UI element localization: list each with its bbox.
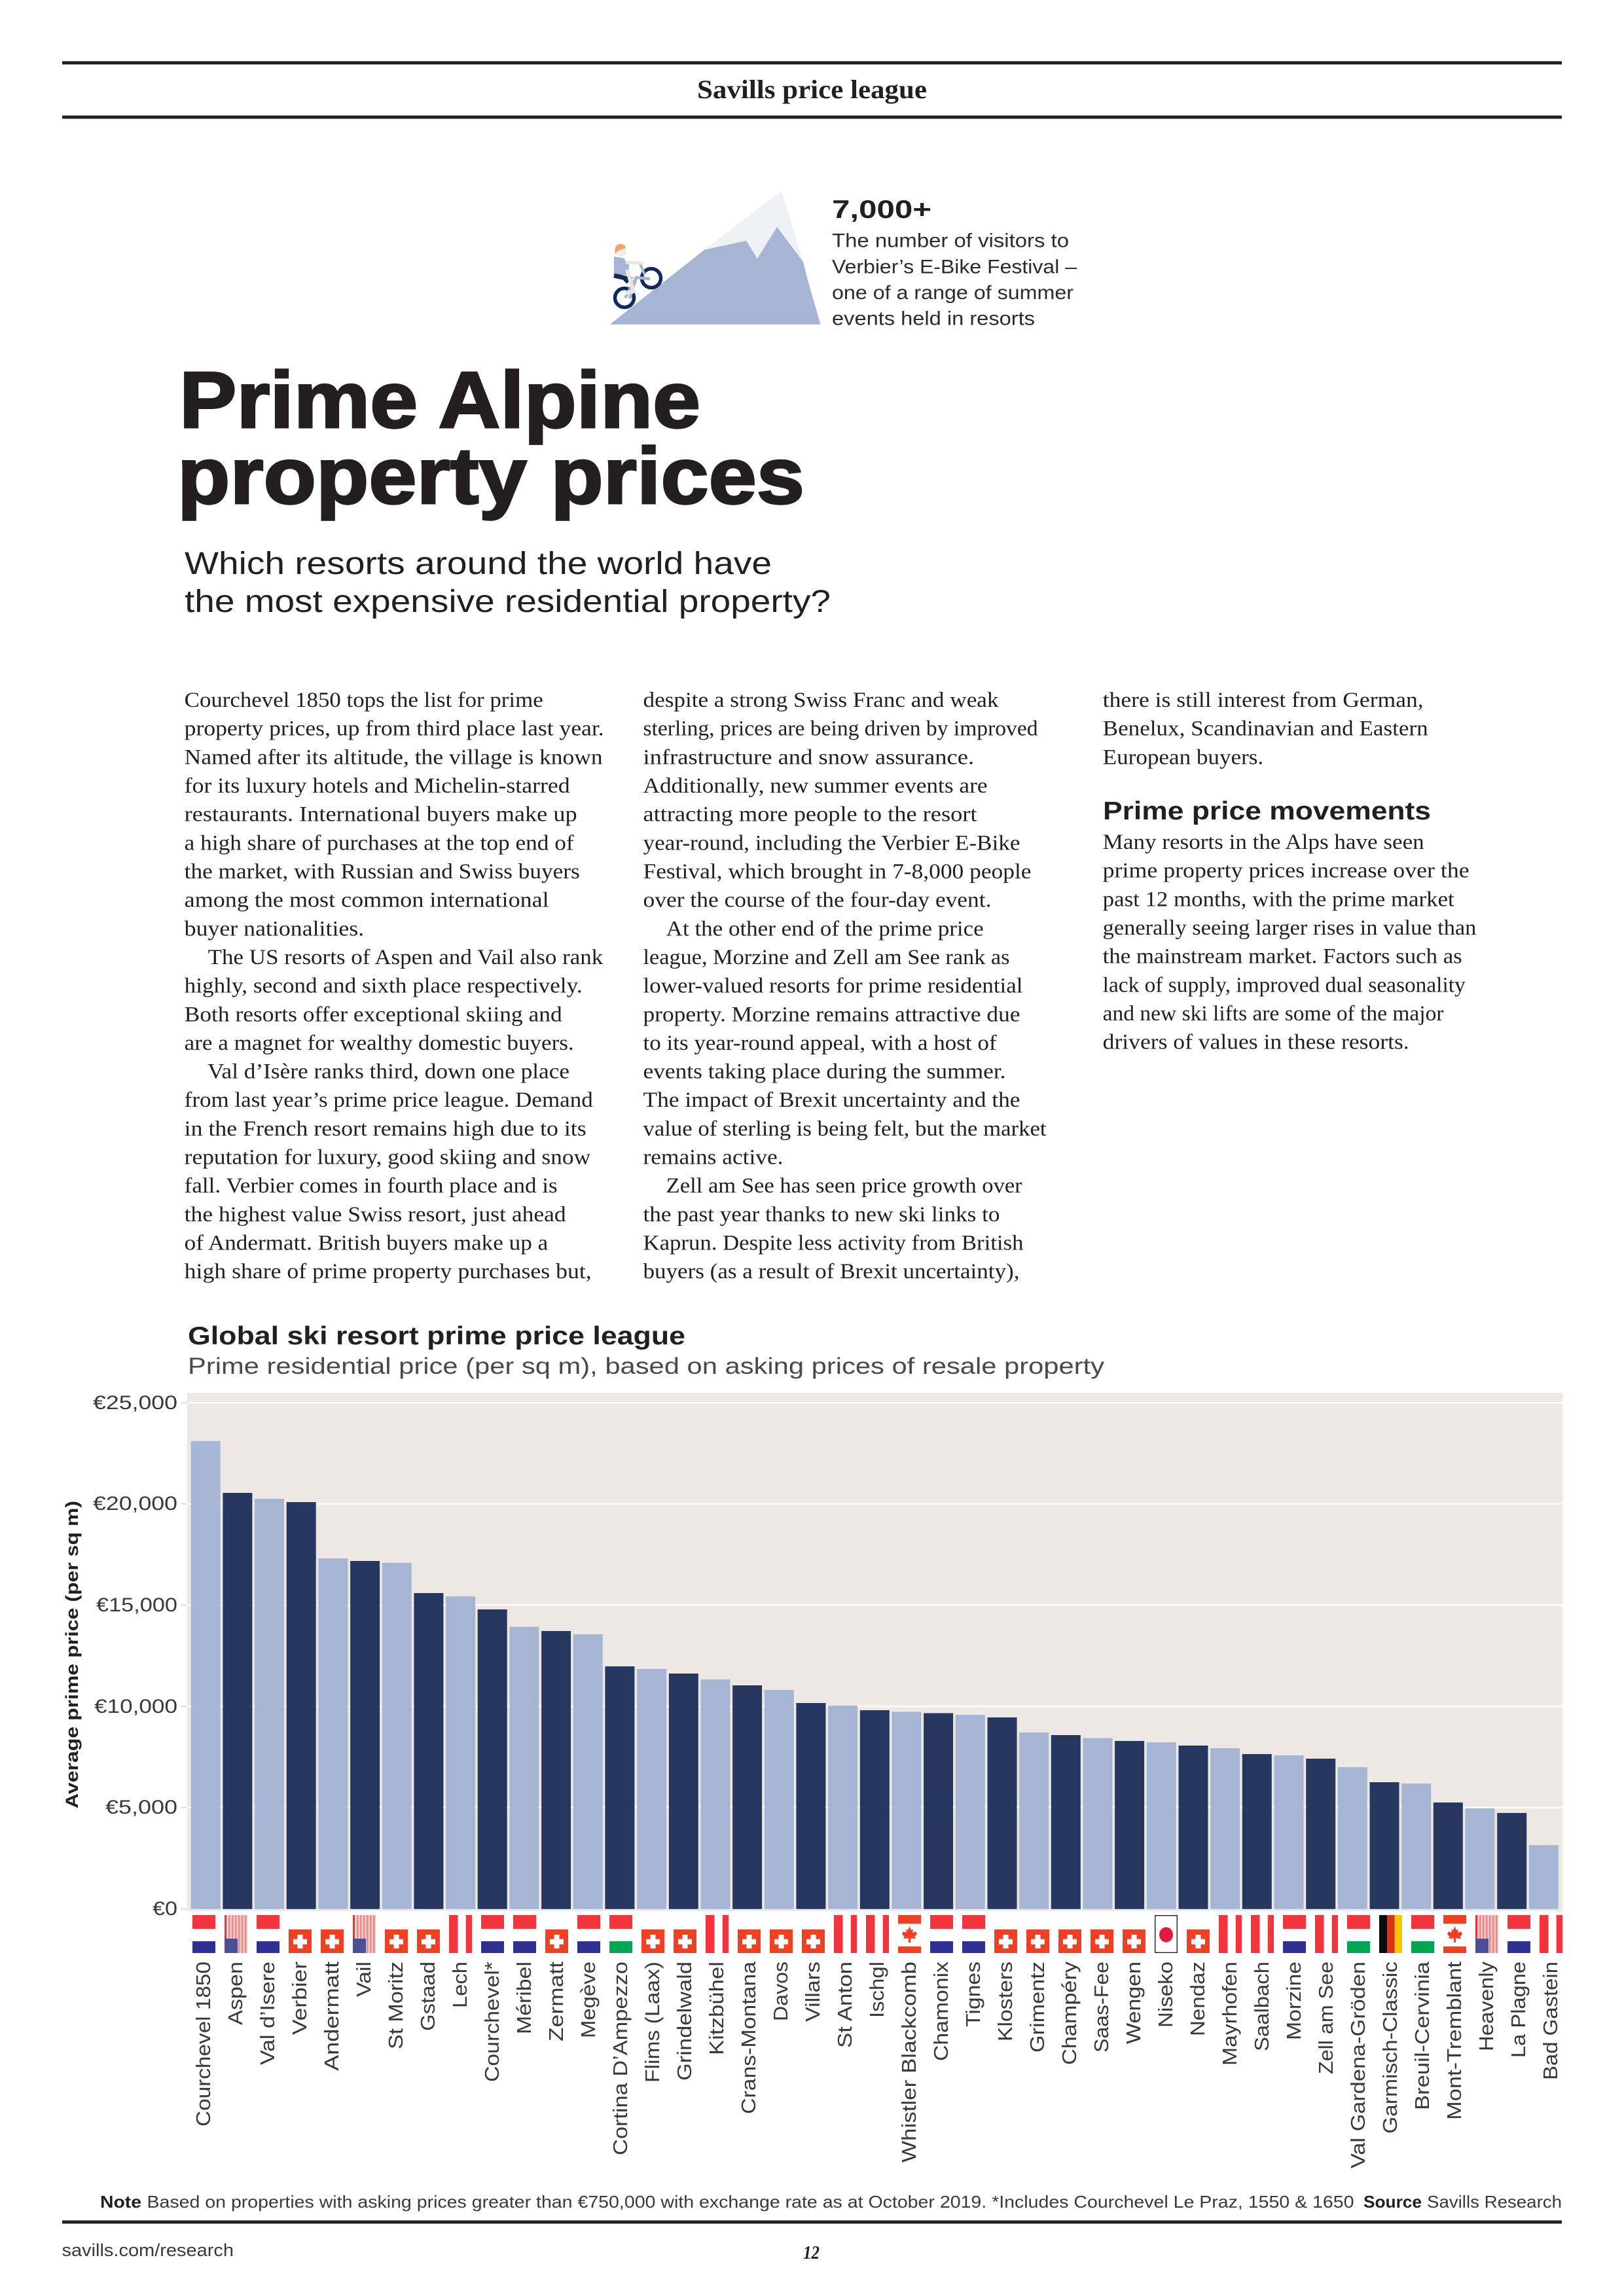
text block: column 1: the market, with Russian and Swiss buyers <box>185 860 580 884</box>
resort name labels: Nendaz <box>1186 1962 1209 2036</box>
text block: prime price movements: generally seeing larger rises in value than <box>1103 916 1476 940</box>
resort name labels: Lech <box>448 1962 471 2008</box>
resort name labels: Andermatt <box>320 1962 343 2071</box>
text block: column 2: value of sterling is being felt, but the market <box>643 1117 1046 1141</box>
bar: Vail <box>350 1561 380 1909</box>
resort name labels: Klosters <box>994 1962 1017 2041</box>
bar: Mont-Tremblant <box>1434 1803 1463 1909</box>
resort name labels: Heavenly <box>1475 1961 1498 2051</box>
resort name labels: Val d’Isere <box>256 1962 279 2065</box>
callout: 7,000+ visitors <box>832 196 1077 330</box>
resort name labels: Crans-Montana <box>737 1961 760 2114</box>
bar: Breuil-Cervinia <box>1401 1784 1431 1909</box>
resort name labels <box>192 1961 1562 2168</box>
icon: cyclist riding up a mountain <box>610 191 821 325</box>
bar: La Plagne <box>1497 1813 1526 1909</box>
resort name labels: Cortina D’Ampezzo <box>609 1962 632 2155</box>
callout: 7,000+ visitors: events held in resorts <box>832 308 1035 330</box>
resort name labels: Courchevel 1850 <box>192 1962 215 2126</box>
resort name labels: Villars <box>801 1962 824 2022</box>
text block: column 1: from last year’s prime price league. Demand <box>185 1088 593 1112</box>
callout: 7,000+ visitors: 7,000+ <box>832 196 931 224</box>
text block: column 1: are a magnet for wealthy domestic buyers. <box>185 1031 574 1055</box>
resort name labels: Saas-Fee <box>1090 1962 1113 2053</box>
bar chart <box>191 1441 1559 1909</box>
text block: column 2: events taking place during the summer. <box>643 1060 1005 1084</box>
text block: prime price movements: past 12 months, with the prime market <box>1103 888 1454 911</box>
resort name labels: Gstaad <box>416 1962 439 2031</box>
header: top rule and section title: Savills price league <box>697 75 927 104</box>
text block: column 2: infrastructure and snow assurance. <box>643 745 974 769</box>
bar: Flims (Laax) <box>637 1669 666 1909</box>
subtitle: the most expensive residential property? <box>185 584 831 619</box>
text block: prime price movements: the mainstream market. Factors such as <box>1103 945 1462 969</box>
text block: prime price movements <box>1103 831 1476 1054</box>
header: top rule and section title <box>62 62 1562 119</box>
bar: Mayrhofen <box>1210 1748 1240 1909</box>
text block: column 2: attracting more people to the resort <box>643 803 977 827</box>
bar: Megève <box>573 1634 603 1909</box>
callout: 7,000+ visitors: one of a range of summer <box>832 282 1074 304</box>
resort name labels: Kitzbühel <box>705 1962 728 2055</box>
subtitle: Which resorts around the world have <box>185 547 772 581</box>
title <box>177 355 804 520</box>
bar: Champéry <box>1051 1735 1081 1909</box>
resort name labels: Grindelwald <box>673 1962 696 2081</box>
chart heading: Global ski resort prime price league <box>188 1322 685 1350</box>
note and source line: Source <box>1363 2192 1422 2212</box>
footer: rule, url and page number: 12 <box>803 2243 820 2263</box>
resort name labels: Ischgl <box>865 1962 888 2018</box>
bar: Andermatt <box>318 1558 348 1909</box>
bar: Klosters <box>987 1717 1017 1909</box>
text block: column 1: fall. Verbier comes in fourth place and is <box>185 1174 558 1198</box>
resort name labels: Chamonix <box>929 1961 952 2061</box>
bar: Cortina D'Ampezzo <box>605 1666 634 1909</box>
resort name labels: Saalbach <box>1250 1962 1273 2051</box>
chart background with gridlines <box>181 1393 1562 1911</box>
y axis labels: €20,000 <box>93 1493 177 1515</box>
bar: Val d'Isere <box>255 1499 284 1909</box>
y axis title: Average prime price (per sq m) <box>62 1501 82 1808</box>
text block: column 3 intro: European buyers. <box>1103 745 1263 769</box>
resort name labels: Flims (Laax) <box>641 1962 664 2083</box>
bar: St Anton <box>828 1706 857 1909</box>
text block: column 2: lower-valued resorts for prime residential <box>643 975 1022 998</box>
bar: Aspen <box>223 1493 252 1909</box>
y axis labels <box>93 1392 177 1920</box>
text block: column 2: Zell am See has seen price growth over <box>666 1174 1022 1198</box>
callout: 7,000+ visitors: The number of visitors to <box>832 230 1069 251</box>
bar: Saalbach <box>1242 1754 1272 1909</box>
resort name labels: Aspen <box>224 1962 247 2025</box>
bar: Grimentz <box>1019 1732 1049 1909</box>
bar: Morzine <box>1274 1755 1304 1909</box>
text block: column 1: a high share of purchases at the top end of <box>185 831 574 855</box>
text block: column 1: of Andermatt. British buyers make up a <box>185 1232 548 1255</box>
text block: column 1: reputation for luxury, good skiing and snow <box>185 1146 591 1170</box>
resort name labels: Davos <box>769 1962 792 2021</box>
bar: Zell am See <box>1306 1759 1335 1909</box>
resort name labels: St Anton <box>833 1962 856 2048</box>
bar: Wengen <box>1115 1741 1144 1909</box>
resort name labels: La Plagne <box>1507 1962 1530 2058</box>
text block: column 1: Both resorts offer exceptional skiing and <box>185 1003 562 1026</box>
bar: Méribel <box>509 1627 539 1909</box>
heading: Prime price movements: Prime price movements <box>1103 797 1431 825</box>
note and source line: Based on properties with asking prices greater than €750,000 with exchange rate as at October 2019. *Includes Courchevel Le Praz, 1550 & 1650 <box>147 2192 1354 2212</box>
resort name labels: Mayrhofen <box>1218 1962 1241 2066</box>
resort name labels: Breuil-Cervinia <box>1411 1961 1434 2110</box>
bar: Nendaz <box>1178 1746 1208 1909</box>
text block: column 1: the highest value Swiss resort, just ahead <box>185 1203 566 1227</box>
text block: column 1: highly, second and sixth place respectively. <box>185 975 583 998</box>
resort name labels: Whistler Blackcomb <box>897 1962 920 2162</box>
bar: St Moritz <box>382 1563 412 1909</box>
y axis labels: €0 <box>153 1898 177 1920</box>
text block: column 2: property. Morzine remains attractive due <box>643 1003 1020 1026</box>
resort name labels: Zell am See <box>1314 1962 1337 2074</box>
y axis labels: €5,000 <box>105 1797 177 1818</box>
bar: Saas-Fee <box>1083 1738 1113 1909</box>
text block: column 2: Additionally, new summer events are <box>643 774 987 798</box>
text block: column 2: league, Morzine and Zell am See rank as <box>643 946 1009 969</box>
bar: Garmisch-Classic <box>1369 1782 1399 1909</box>
text block: column 2: At the other end of the prime price <box>666 917 984 941</box>
text block: column 1: Courchevel 1850 tops the list for prime <box>185 689 543 712</box>
text block: column 2: despite a strong Swiss Franc and weak <box>643 689 999 712</box>
text block: column 1: high share of prime property purchases but, <box>185 1260 592 1283</box>
bar: Gstaad <box>414 1593 443 1909</box>
callout: 7,000+ visitors: Verbier’s E-Bike Festival – <box>832 257 1077 278</box>
row of country flags <box>192 1915 1562 1953</box>
text block: column 1: for its luxury hotels and Michelin-starred <box>185 774 570 798</box>
bar: Verbier <box>287 1502 316 1909</box>
resort name labels: Morzine <box>1282 1962 1305 2040</box>
text block: column 2: The impact of Brexit uncertainty and the <box>643 1088 1020 1112</box>
text block: column 2: Kaprun. Despite less activity from British <box>643 1232 1024 1255</box>
subtitle <box>185 547 831 619</box>
text block: column 1 <box>185 689 604 1283</box>
text block: column 1: Named after its altitude, the village is known <box>185 745 603 769</box>
text block: prime price movements: and new ski lifts are some of the major <box>1103 1002 1444 1026</box>
text block: column 2: to its year-round appeal, with a host of <box>643 1031 997 1055</box>
text block: column 2: over the course of the four-day event. <box>643 889 991 912</box>
resort name labels: Tignes <box>962 1962 984 2027</box>
y axis labels: €10,000 <box>94 1696 177 1717</box>
bar: Tignes <box>956 1715 985 1909</box>
text block: column 1: restaurants. International buyers make up <box>185 803 577 827</box>
resort name labels: Wengen <box>1122 1962 1145 2044</box>
text block: column 1: in the French resort remains high due to its <box>185 1117 586 1141</box>
text block: column 2: the past year thanks to new ski links to <box>643 1203 1000 1227</box>
text block: column 3 intro: Benelux, Scandinavian and Eastern <box>1103 717 1428 741</box>
bar: Heavenly <box>1465 1808 1495 1909</box>
text block: prime price movements: lack of supply, improved dual seasonality <box>1103 973 1466 997</box>
text block: column 1: The US resorts of Aspen and Vail also rank <box>208 946 604 969</box>
text block: column 1: buyer nationalities. <box>185 917 364 941</box>
note and source line: Note <box>100 2192 141 2212</box>
resort name labels: Courchevel* <box>480 1962 503 2082</box>
bar: Davos <box>765 1690 794 1909</box>
bar: Lech <box>446 1596 475 1909</box>
bar: Whistler Blackcomb <box>892 1712 921 1909</box>
resort name labels: Vail <box>352 1962 375 1997</box>
text block: prime price movements: prime property prices increase over the <box>1103 859 1470 883</box>
footer: rule, url and page number <box>62 2220 1562 2263</box>
bar: Bad Gastein <box>1529 1845 1559 1909</box>
resort name labels: Mont-Tremblant <box>1443 1962 1466 2120</box>
resort name labels: Megève <box>577 1962 600 2038</box>
bar: Niseko <box>1147 1742 1176 1909</box>
text block: column 3 intro <box>1103 689 1428 769</box>
bar: Val Gardena-Gröden <box>1338 1767 1367 1909</box>
resort name labels: Champéry <box>1058 1961 1081 2065</box>
text block: column 2: Festival, which brought in 7-8,000 people <box>643 860 1032 884</box>
footer: rule, url and page number: savills.com/research <box>62 2240 234 2260</box>
resort name labels: Niseko <box>1154 1962 1177 2028</box>
y axis labels: €15,000 <box>96 1594 177 1616</box>
text block: prime price movements: Many resorts in the Alps have seen <box>1103 831 1424 854</box>
title: Prime Alpine <box>179 355 700 444</box>
chart subheading: Prime residential price (per sq m), based on asking prices of resale property <box>188 1354 1105 1379</box>
text block: column 1: among the most common international <box>185 889 549 912</box>
bar: Villars <box>796 1703 825 1909</box>
bar: Courchevel 1850 <box>191 1441 221 1909</box>
resort name labels: Bad Gastein <box>1539 1962 1562 2080</box>
resort name labels: Grimentz <box>1026 1962 1049 2053</box>
text block: column 2: sterling, prices are being driven by improved <box>643 717 1038 741</box>
resort name labels: Zermatt <box>545 1962 568 2041</box>
text block: prime price movements: drivers of values in these resorts. <box>1103 1031 1409 1054</box>
bar: Zermatt <box>541 1631 571 1909</box>
bar: Ischgl <box>860 1710 890 1909</box>
bar: Grindelwald <box>669 1674 698 1909</box>
text block: column 2: remains active. <box>643 1146 783 1170</box>
bar: Courchevel* <box>478 1609 507 1909</box>
title: property prices <box>177 431 804 520</box>
note and source line: Savills Research <box>1427 2192 1562 2212</box>
resort name labels: Val Gardena-Gröden <box>1346 1962 1369 2168</box>
bar: Chamonix <box>924 1713 953 1909</box>
text block: column 1: Val d’Isère ranks third, down one place <box>208 1060 569 1084</box>
y axis labels: €25,000 <box>93 1392 177 1414</box>
text block: column 1: property prices, up from third place last year. <box>185 717 604 741</box>
text block: column 2 <box>643 689 1046 1283</box>
bar: Crans-Montana <box>732 1685 762 1909</box>
text block: column 2: year-round, including the Verbier E-Bike <box>643 831 1020 855</box>
resort name labels: Méribel <box>513 1962 535 2034</box>
text block: column 2: buyers (as a result of Brexit uncertainty), <box>643 1260 1020 1283</box>
resort name labels: Verbier <box>288 1962 311 2035</box>
text block: column 3 intro: there is still interest from German, <box>1103 689 1424 712</box>
resort name labels: Garmisch-Classic <box>1379 1962 1401 2134</box>
resort name labels: St Moritz <box>384 1962 407 2049</box>
bar: Kitzbühel <box>700 1679 730 1909</box>
